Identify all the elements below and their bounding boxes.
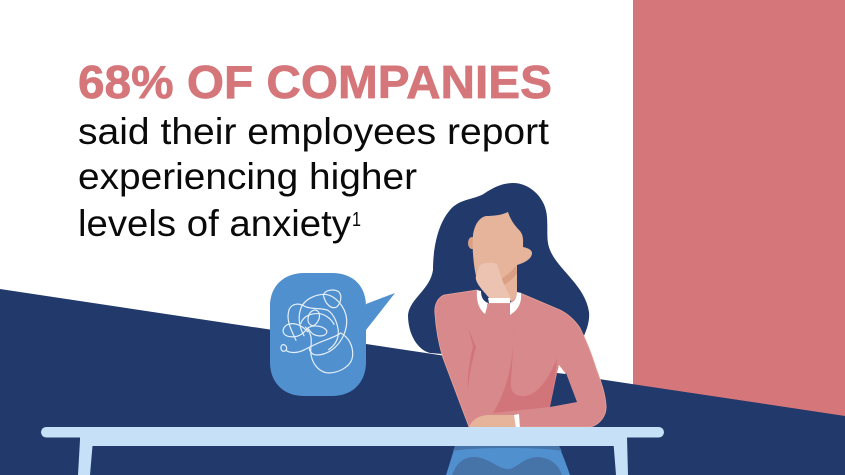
hand on table xyxy=(469,415,517,428)
table xyxy=(41,427,664,475)
right table leg xyxy=(613,437,628,475)
hair xyxy=(408,183,589,360)
text block: description: experiencing higher xyxy=(78,156,417,197)
hand on chin xyxy=(476,263,511,299)
panel: pink wall xyxy=(633,0,845,417)
text block: description: 1 xyxy=(352,209,361,231)
skirt shadow xyxy=(452,457,562,475)
neck xyxy=(487,262,517,304)
left table leg xyxy=(78,440,93,475)
figure: woman xyxy=(408,183,606,428)
skirt top shade xyxy=(453,446,562,451)
cuff xyxy=(514,414,520,428)
panel: navy floor xyxy=(0,289,845,475)
sweater body shading xyxy=(493,313,557,413)
collar xyxy=(477,290,521,315)
title: 68% OF COMPANIES xyxy=(78,56,552,108)
icon: speech bubble with tangled thoughts xyxy=(270,273,395,396)
icon: scribble xyxy=(281,290,353,373)
text block: description: said their employees report xyxy=(78,111,550,152)
sleeve crease xyxy=(468,328,476,390)
neck shadow xyxy=(501,266,517,285)
sweater xyxy=(435,290,606,427)
ear xyxy=(468,237,476,249)
text block: description: levels of anxiety xyxy=(78,203,352,244)
gap background xyxy=(557,365,566,374)
skirt xyxy=(446,446,570,475)
text block: description xyxy=(78,111,550,244)
gap under arm xyxy=(550,373,577,407)
face xyxy=(473,212,532,284)
